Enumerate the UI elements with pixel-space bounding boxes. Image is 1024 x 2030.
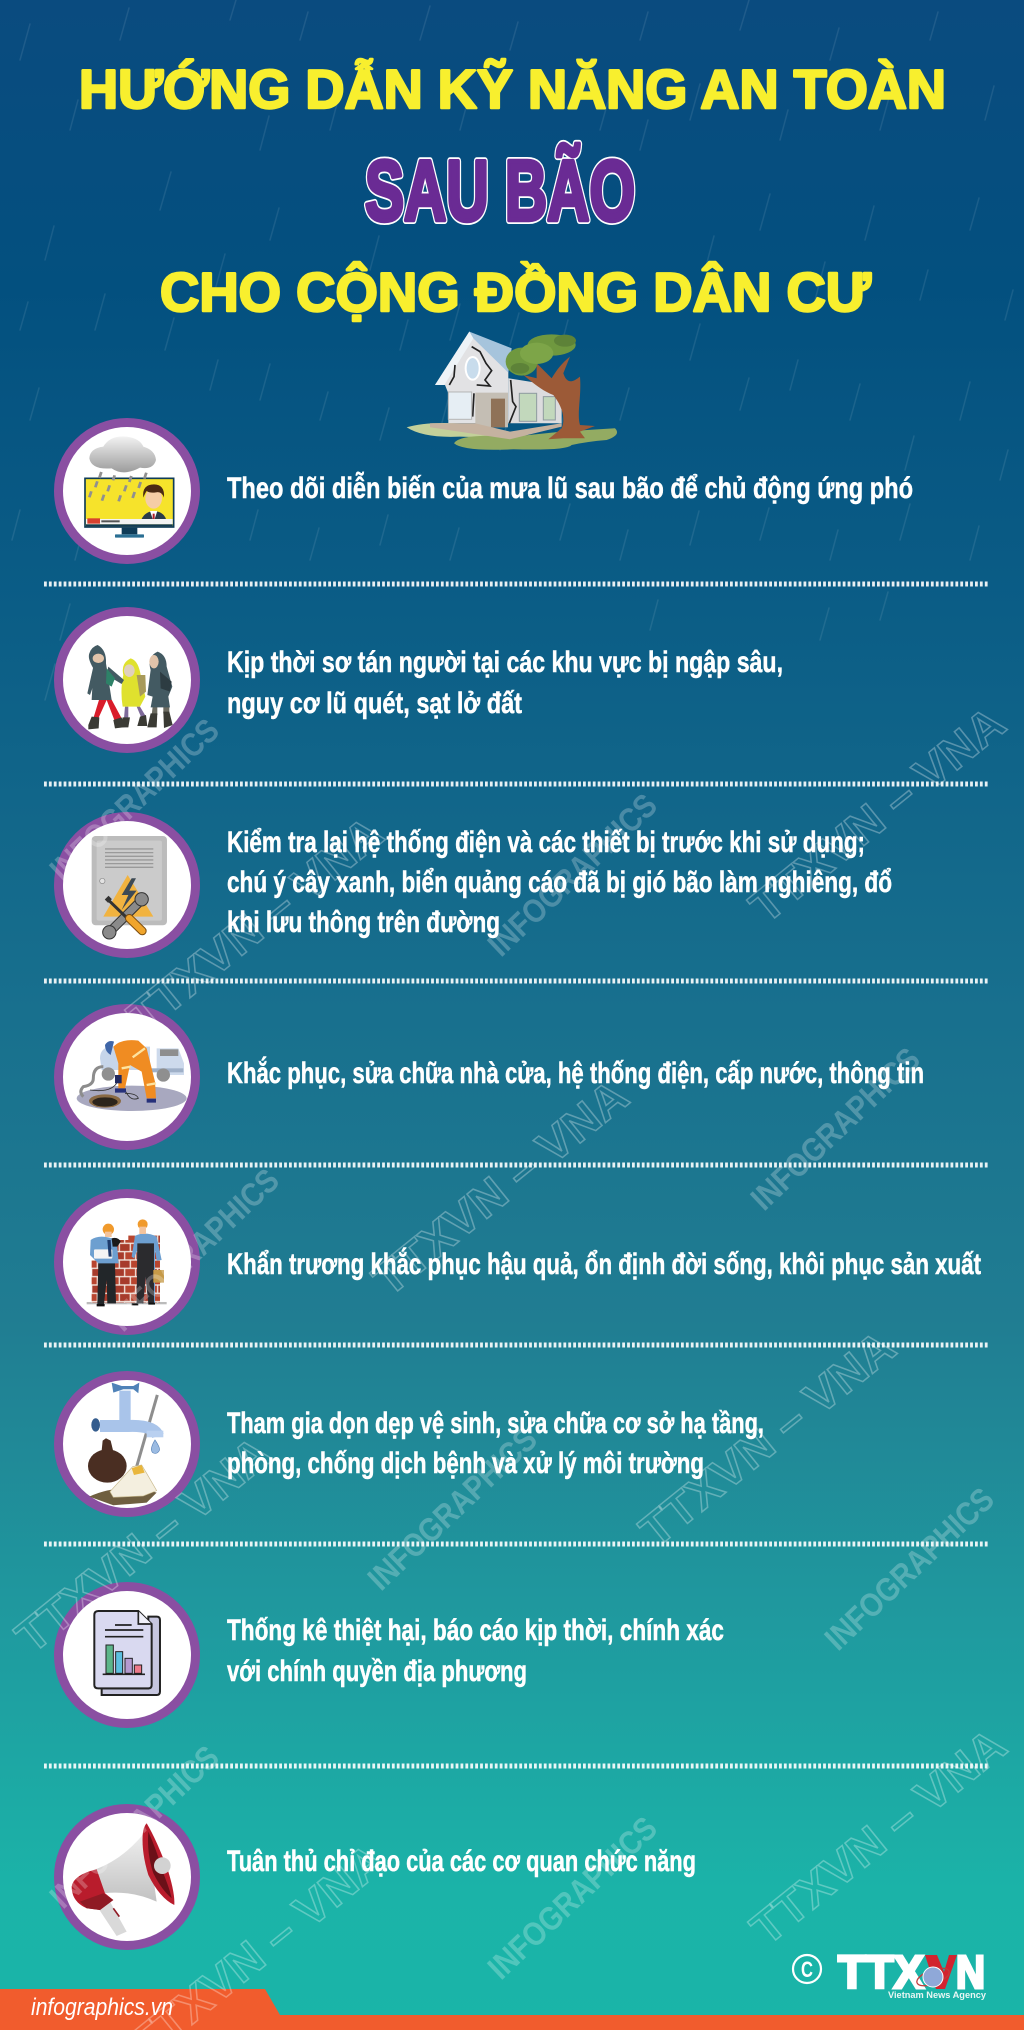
text: [227, 646, 783, 720]
text: Tuân thủ chỉ đạo của các cơ quan chức năng: [227, 1845, 696, 1878]
watermark: TTXVN - VNA: TTXVN – VNA: [630, 1320, 905, 1557]
panel: step 1: [58, 422, 913, 560]
icon: report document with bar chart: [58, 1586, 196, 1724]
watermark: TTXVN - VNA: TTXVN – VNA: [6, 1426, 281, 1663]
logo: TTXVN: N: [956, 1946, 985, 1998]
text: Tham gia dọn dẹp vệ sinh, sửa chữa cơ sở hạ tầng,: [227, 1407, 764, 1440]
logo: TTXVN: TTX: [838, 1946, 924, 1998]
text: khi lưu thông trên đường: [227, 906, 500, 939]
icon: worker repairing drain: [58, 1008, 196, 1146]
heading line 2: SAU BÃO: SAU BÃO: [365, 143, 635, 239]
watermark: TTXVN - VNA: TTXVN – VNA: [740, 696, 1015, 933]
title: [79, 58, 946, 323]
panel: step 3: [58, 816, 892, 954]
watermark: INFOGRAPHICS: INFOGRAPHICS: [817, 1480, 1001, 1657]
logo: TTXVN: [793, 1946, 987, 2001]
logo: TTXVN: Vietnam News Agency: [888, 1990, 987, 2001]
panel: step 7: [58, 1586, 724, 1724]
heading line 1: HƯỚNG DẪN KỸ NĂNG AN TOÀN: [79, 58, 946, 120]
watermark: TTXVN - VNA: TTXVN – VNA: [363, 1069, 638, 1306]
text: [227, 826, 892, 939]
icon: evacuating people: [58, 612, 196, 748]
watermark: TTXVN - VNA: TTXVN – VNA: [741, 1718, 1016, 1955]
heading line 2: SAU BÃO: SAU BÃO: [365, 143, 635, 239]
text: phòng, chống dịch bệnh và xử lý môi trường: [227, 1447, 704, 1480]
watermark: INFOGRAPHICS: INFOGRAPHICS: [42, 711, 226, 888]
text: [227, 1407, 764, 1480]
icon: electrical box and tools: [58, 816, 196, 954]
watermark: INFOGRAPHICS: INFOGRAPHICS: [102, 1161, 286, 1338]
heading line 3: CHO CỘNG ĐỒNG DÂN CƯ: [160, 261, 871, 323]
watermark: INFOGRAPHICS: [42, 711, 1001, 1986]
watermark: INFOGRAPHICS: INFOGRAPHICS: [42, 1738, 226, 1915]
icon: weather news on TV: [58, 422, 196, 560]
text: Thống kê thiệt hại, báo cáo kịp thời, chính xác: [227, 1614, 724, 1647]
footer site label: infographics.vn: [31, 1994, 173, 2021]
text: Kịp thời sơ tán người tại các khu vực bị ngập sâu,: [227, 646, 783, 679]
watermark: INFOGRAPHICS: INFOGRAPHICS: [480, 1809, 664, 1986]
panel: step 5: [58, 1194, 981, 1330]
text: với chính quyền địa phương: [227, 1655, 527, 1688]
panel: step 8: [58, 1808, 696, 1946]
footer bar: [0, 1989, 1024, 2030]
heading line 2: SAU BÃO: [365, 143, 635, 239]
watermark: INFOGRAPHICS: INFOGRAPHICS: [360, 1420, 544, 1597]
panel: step 4: [58, 1008, 924, 1146]
logo: TTXVN: C: [801, 1957, 813, 1982]
watermark: INFOGRAPHICS: INFOGRAPHICS: [743, 1040, 927, 1217]
text: [227, 1614, 724, 1688]
watermark: TTXVN - VNA: TTXVN – VNA: [118, 806, 393, 1043]
icon: megaphone: [58, 1808, 196, 1946]
icon: builders and brick wall: [58, 1194, 196, 1330]
icon: tap, rubbish bag and mop: [58, 1376, 196, 1512]
watermark: TTXVN - VNA: [6, 696, 1016, 2030]
panel: step 6: [58, 1376, 764, 1512]
icon: damaged house and fallen tree: [407, 332, 617, 450]
watermark: INFOGRAPHICS: INFOGRAPHICS: [480, 786, 664, 963]
panel: step 2: [58, 612, 783, 748]
text: nguy cơ lũ quét, sạt lở đất: [227, 687, 522, 720]
